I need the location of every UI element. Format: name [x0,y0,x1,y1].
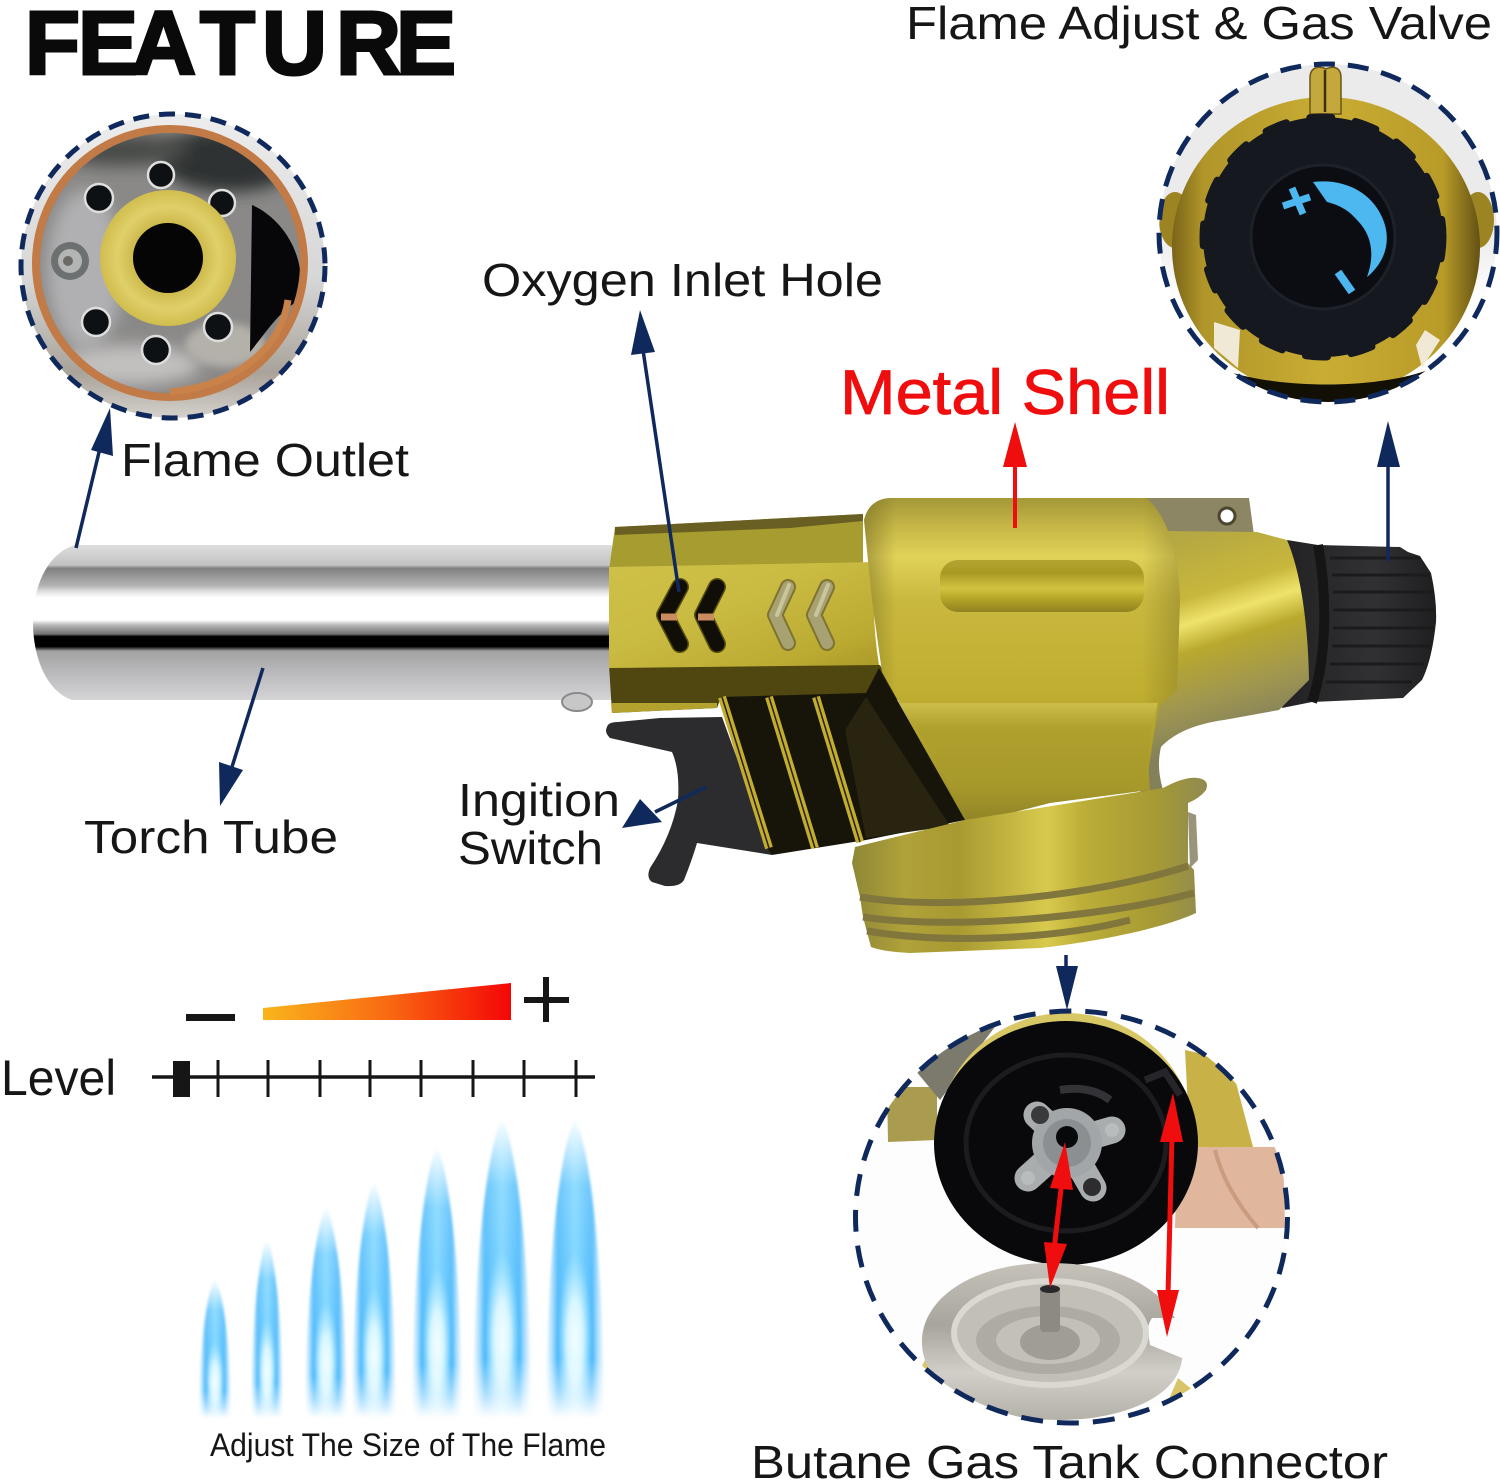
rim of torch tube [21,114,325,418]
arrow: connector [1056,955,1078,1010]
oxygen inlet slits [661,585,828,644]
label: ignition switch: Switch [458,822,603,874]
label: ignition switch [458,774,620,874]
main metal shell [864,498,1180,822]
left gold wing [887,1087,937,1142]
black grip [720,668,965,855]
red arrow: lug [1157,1093,1183,1337]
label: metal shell: Metal Shell [840,358,1170,428]
level label: Level [1,1050,116,1106]
hand [1175,1147,1285,1228]
gas nozzle [51,242,89,280]
copper coil ring [36,129,304,397]
light backdrop [1159,64,1496,274]
arrow: flame outlet [76,408,113,548]
white highlights [1214,322,1440,368]
dashed border [856,1011,1288,1423]
copper coil tail [170,300,288,392]
lower front strip [609,665,899,713]
arrow: metal shell [1003,422,1027,528]
grip gold stripes [722,697,860,848]
torch gold body [606,498,1436,953]
dashed border [1159,64,1497,402]
rear knob [1282,540,1436,708]
lower body [899,703,1158,825]
panel: flame outlet close-up [21,114,325,418]
panel: flame adjust knob close-up [1159,64,1497,410]
flame level legend [1,977,595,1106]
burner hole [133,223,203,293]
label: torch tube: Torch Tube [84,811,338,863]
gas connector collar [852,778,1207,953]
gold base under tank [922,1360,1191,1398]
rear cone [1140,531,1309,795]
arrow: ignition switch [622,787,706,828]
plus sign [524,977,569,1022]
arrow: flame adjust [1377,421,1400,561]
panel: butane connector close-up [856,1011,1288,1425]
label: oxygen inlet hole: Oxygen Inlet Hole [482,254,883,306]
arrow: torch tube [219,668,263,806]
blue flames by level [199,1120,604,1430]
top valve tab [1310,67,1341,114]
label: flame outlet: Flame Outlet [121,434,409,486]
front vented panel [609,562,879,668]
lower strip gold edge [611,703,717,713]
label: ignition switch: Ingition [458,774,620,826]
upper front shadow [615,514,863,535]
barrel slot [940,560,1144,612]
rear lug [1140,498,1254,535]
white backdrop [856,1011,1288,1423]
tube bolt [562,693,592,711]
right gold wing [1185,1050,1253,1147]
dark cavity [250,205,300,352]
gold rim top [948,1013,1184,1088]
plus mark [1283,188,1310,214]
air holes [82,162,235,364]
dashed border [21,114,325,418]
steel plate with reflections [40,133,300,393]
arrow: oxygen inlet [631,310,679,592]
red arrow: valve [1044,1142,1073,1288]
heat wedge [263,983,511,1020]
gold housing [1172,97,1480,397]
black scalloped knob [1203,117,1443,357]
knob inner disc [1251,165,1395,309]
silver hub [1021,1106,1119,1196]
lower dark band [1234,370,1426,402]
black connector disc [934,1021,1198,1265]
ignition trigger [606,717,772,886]
blue crescent [1313,181,1387,277]
brass burner ring [100,190,236,326]
minus sign [186,1014,235,1021]
upper front section [609,514,863,570]
level scale [152,1060,595,1097]
torch tube [33,545,612,711]
minus mark [1338,272,1352,292]
side lugs [1159,192,1494,248]
gas tank top [922,1263,1182,1420]
flame caption: Adjust The Size of The Flame [210,1427,606,1463]
